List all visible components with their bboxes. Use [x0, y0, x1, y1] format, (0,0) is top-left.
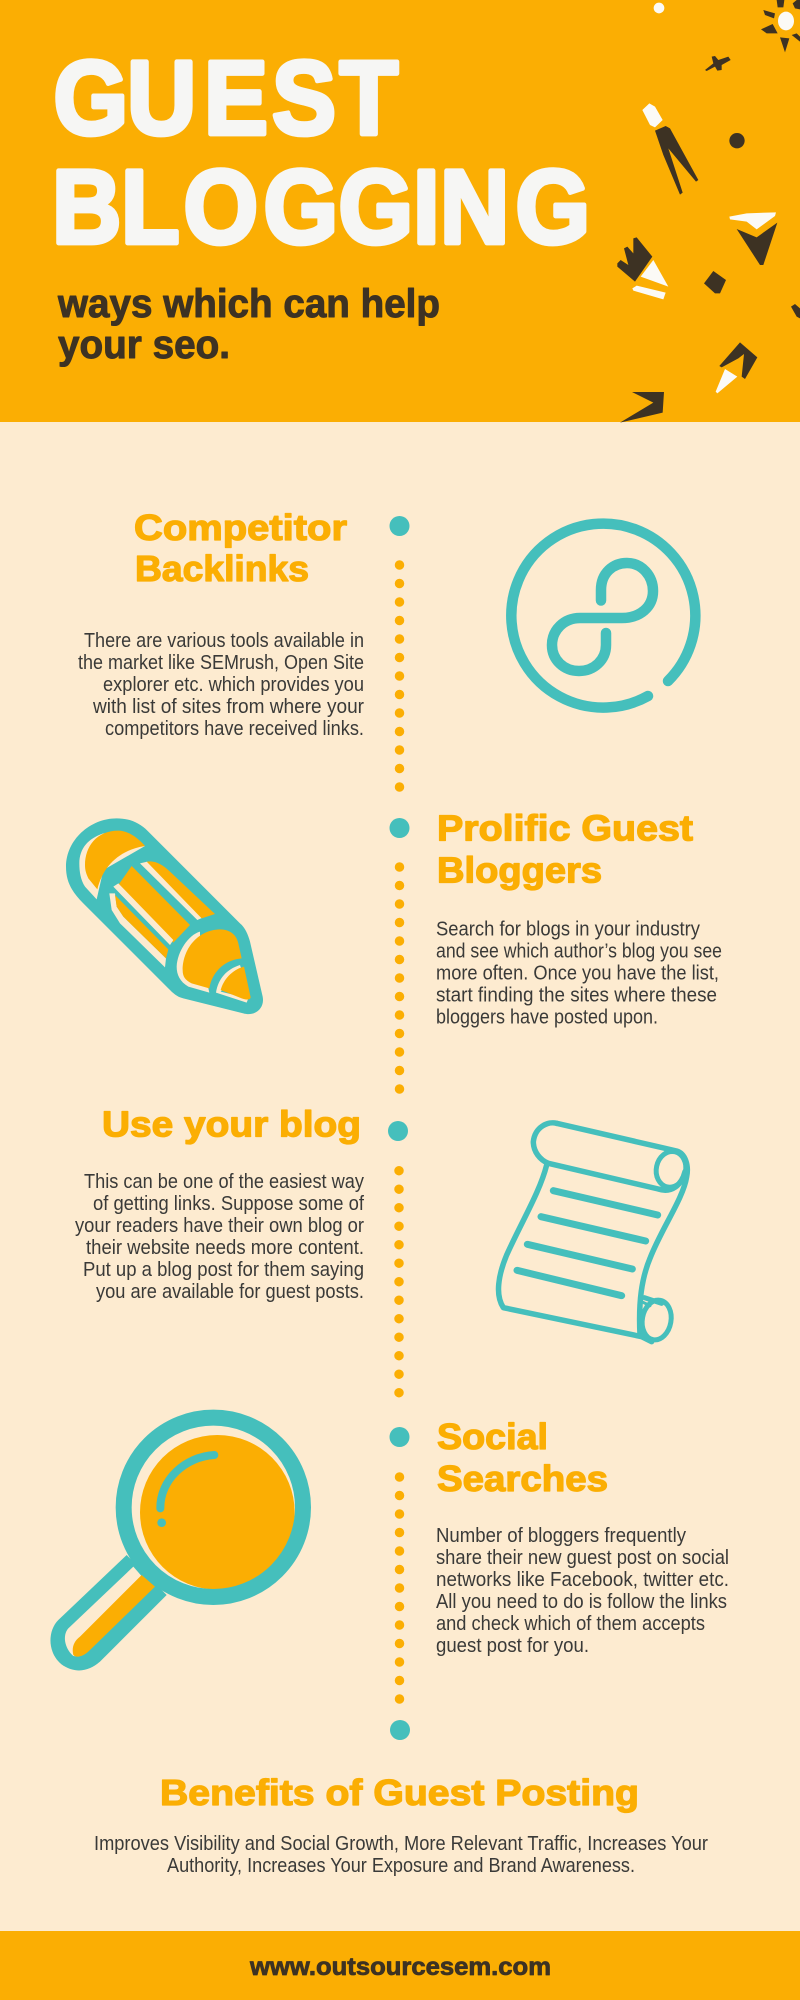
body text: and see which author’s blog you see	[436, 940, 722, 962]
body text: you are available for guest posts.	[96, 1281, 364, 1303]
body text: the market like SEMrush, Open Site	[78, 652, 364, 674]
heading	[437, 1416, 608, 1499]
body text: Improves Visibility and Social Growth, More Relevant Traffic, Increases Your	[94, 1833, 708, 1855]
heading: Competitor	[134, 507, 347, 548]
section: competitor backlinks	[78, 507, 695, 740]
body text: Authority, Increases Your Exposure and Brand Awareness.	[167, 1855, 635, 1877]
timeline nodes	[388, 516, 410, 1740]
body text: This can be one of the easiest way	[84, 1171, 364, 1193]
body text: networks like Facebook, twitter etc.	[436, 1569, 729, 1591]
body text: guest post for you.	[436, 1635, 589, 1657]
body text: Search for blogs in your industry	[436, 918, 700, 940]
section: benefits	[94, 1772, 708, 1877]
icon: scroll	[499, 1123, 689, 1342]
heading: Prolific Guest	[437, 808, 693, 848]
body text: start finding the sites where these	[436, 984, 717, 1006]
body text	[436, 1525, 729, 1657]
heading: Social	[437, 1416, 548, 1457]
body text: more often. Once you have the list,	[436, 962, 719, 984]
icon: pencil	[66, 818, 263, 1014]
body text: Number of bloggers frequently	[436, 1525, 686, 1547]
heading: Bloggers	[437, 850, 602, 890]
title: GUEST	[53, 40, 398, 157]
title	[52, 40, 590, 266]
body text	[94, 1833, 708, 1877]
body text: explorer etc. which provides you	[103, 674, 364, 696]
heading: Benefits of Guest Posting	[160, 1772, 639, 1813]
title: BLOGGING	[52, 149, 590, 266]
icon: link circle	[511, 524, 695, 708]
section: use your blog	[75, 1104, 689, 1342]
heading	[134, 507, 347, 589]
subtitle	[57, 282, 440, 367]
body text: Put up a blog post for them saying	[83, 1259, 364, 1281]
body text: There are various tools available in	[84, 630, 364, 652]
heading: Searches	[437, 1458, 608, 1499]
footer	[0, 1931, 800, 2000]
timeline	[388, 516, 410, 1740]
heading: Use your blog	[102, 1104, 361, 1144]
header banner	[0, 0, 800, 423]
body text: of getting links. Suppose some of	[93, 1193, 364, 1215]
subtitle: your seo.	[58, 323, 230, 367]
timeline dots	[394, 565, 404, 1702]
footer url: www.outsourcesem.com	[249, 1953, 551, 1981]
decorative confetti shapes	[617, 0, 800, 423]
body text: your readers have their own blog or	[75, 1215, 364, 1237]
body text	[436, 918, 722, 1028]
body text: competitors have received links.	[105, 718, 364, 740]
heading: Backlinks	[135, 548, 309, 589]
section: social searches	[50, 1416, 729, 1670]
body text: and check which of them accepts	[436, 1613, 705, 1635]
body text: their website needs more content.	[86, 1237, 364, 1259]
section: prolific guest bloggers	[66, 808, 722, 1028]
body text: All you need to do is follow the links	[436, 1591, 727, 1613]
body text: with list of sites from where your	[92, 696, 364, 718]
subtitle: ways which can help	[57, 282, 440, 326]
icon: magnifying glass	[50, 1418, 303, 1670]
body text	[78, 630, 364, 740]
body text: bloggers have posted upon.	[436, 1006, 658, 1028]
body text	[75, 1171, 364, 1303]
heading	[437, 808, 693, 890]
body text: share their new guest post on social	[436, 1547, 729, 1569]
